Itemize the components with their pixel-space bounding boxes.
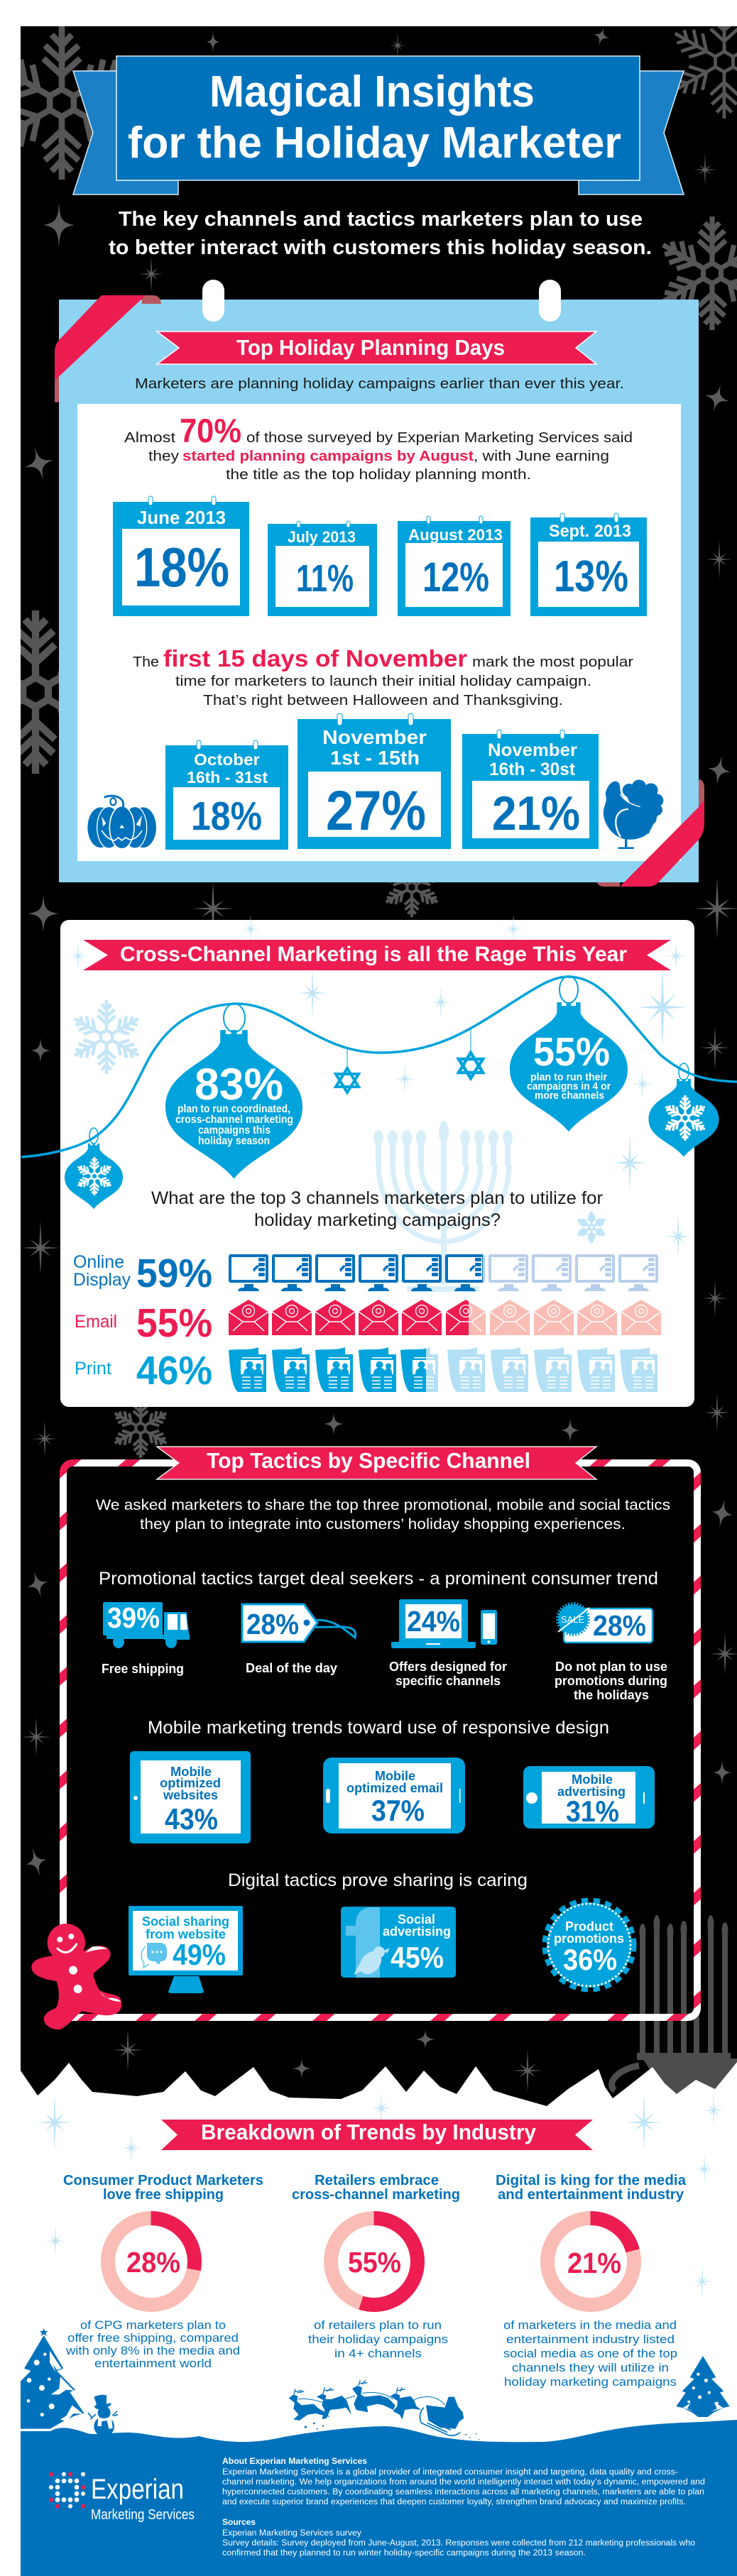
panel: top tactics by specific channel [31, 1447, 697, 2029]
text: 70 percent statement: , with June earning [474, 449, 609, 464]
column: digital media and entertainment: channels they will utilize in [512, 2361, 669, 2374]
donut: 55 percent [331, 2218, 417, 2305]
title text: for the Holiday Marketer [128, 119, 621, 168]
black night background [21, 26, 737, 2127]
icon: truck 39 percent free shipping: Free shipping [102, 1661, 184, 1676]
icon: laptop and phone 24 percent [389, 1599, 507, 1688]
calendar: Sept 2013 [530, 513, 647, 616]
calendar: October 16-31 [165, 740, 288, 850]
menorah watermark [373, 1121, 513, 1292]
seal: product promotions 36 percent: Product [565, 1919, 613, 1934]
column: retailers: their holiday campaigns [308, 2333, 448, 2346]
subtitle: The key channels and tactics marketers plan to use [119, 208, 643, 231]
seal: product promotions 36 percent: 36% [563, 1943, 617, 1976]
icon: laptop and phone 24 percent: Offers designed for [389, 1659, 507, 1674]
calendar: June 2013: June 2013 [137, 507, 226, 528]
sleigh with Santa [305, 2397, 480, 2440]
icon: sale badge 28 percent: the holidays [574, 1687, 649, 1702]
icon: pumpkin [87, 796, 156, 849]
calendar: October 16-31: October [194, 750, 260, 769]
light decorative stars and flakes [68, 915, 691, 1259]
channel: email: 55% [136, 1300, 212, 1346]
channel: print: 46% [136, 1348, 212, 1393]
channel: print [75, 1347, 657, 1393]
snowman [88, 2395, 118, 2437]
calendar: August 2013: 12% [422, 554, 489, 601]
subtitle: to better interact with customers this holiday season. [109, 236, 652, 259]
snow drift edge [0, 2062, 737, 2137]
calendar: June 2013: 18% [134, 536, 229, 598]
column: digital media and entertainment: holiday marketing campaigns [504, 2375, 677, 2389]
calendar: July 2013: 11% [296, 557, 354, 600]
text: first 15 days of November: mark the most popular [472, 654, 633, 670]
logo dot mark [49, 2472, 85, 2509]
column: consumer product marketers: with only 8% in the media and [65, 2344, 240, 2357]
about text: About Experian Marketing Services [222, 2457, 367, 2466]
ornament: 55 percent: more channels [535, 1090, 604, 1102]
device: phone 31 percent: 31% [566, 1794, 619, 1828]
panel background [60, 920, 694, 1407]
Experian logo: Experian [91, 2474, 184, 2505]
column: digital media and entertainment: Digital is king for the media [496, 2173, 687, 2188]
column: digital media and entertainment: and entertainment industry [498, 2187, 684, 2203]
icon: tag 28 percent deal of the day: 28% [246, 1608, 299, 1640]
heading: mobile marketing: Mobile marketing trends toward use of responsive design [148, 1718, 609, 1738]
calendar: July 2013: July 2013 [288, 528, 356, 546]
text: 70 percent statement: of those surveyed by Experian Marketing Services said [246, 430, 633, 446]
column: retailers: of retailers plan to run [314, 2318, 442, 2332]
ornament: 83 percent: cross-channel marketing [175, 1114, 293, 1126]
donut: 21 percent: 21% [567, 2247, 621, 2279]
question text: What are the top 3 channels marketers plan to utilize for [151, 1188, 603, 1208]
icon: sale badge 28 percent: SALE [561, 1614, 584, 1625]
calendar: July 2013 [268, 521, 377, 616]
question text [151, 1188, 603, 1230]
banner: top tactics: Top Tactics by Specific Channel [207, 1448, 530, 1473]
icon: sale badge 28 percent: Do not plan to use [555, 1659, 667, 1674]
channel: online display: Display [73, 1270, 131, 1290]
banner: cross-channel marketing: Cross-Channel Marketing is all the Rage This Year [120, 943, 627, 966]
pictogram row: monitors [229, 1254, 658, 1291]
banner: cross-channel marketing [83, 940, 671, 970]
channel: online display: Online [73, 1252, 124, 1272]
about text: and execute superior brand experiences that deepen customer loyalty, strengthen brand advocacy and maximize profits. [222, 2498, 686, 2506]
column: digital media and entertainment: entertainment industry listed [506, 2333, 675, 2346]
column: consumer product marketers: offer free shipping, compared [67, 2331, 239, 2345]
calendar: Sept 2013: 13% [554, 552, 628, 601]
device: tablet 43 percent [130, 1751, 251, 1843]
text: first 15 days of November: The [133, 654, 159, 670]
text: 70 percent statement: started planning campaigns by August [182, 449, 474, 464]
intro sentence: Marketers are planning holiday campaigns earlier than ever this year. [135, 376, 624, 392]
title text [128, 67, 621, 168]
gingerbread man [31, 1924, 121, 2029]
calendar: August 2013: August 2013 [408, 526, 503, 544]
calendar: Sept 2013: Sept. 2013 [549, 522, 631, 541]
monitor: social sharing 49 percent: Social sharing [142, 1914, 229, 1929]
panel: breakdown of trends by industry [37, 2090, 724, 2389]
text: first 15 days of November [133, 645, 633, 708]
heading: digital tactics: Digital tactics prove sharing is caring [228, 1870, 528, 1890]
calendar: November 16-30 [462, 730, 599, 849]
ornament: 83 percent: holiday season [198, 1135, 270, 1147]
light decorative stars [37, 2090, 724, 2298]
panel: cross-channel marketing [21, 915, 737, 1407]
column: retailers [292, 2173, 460, 2360]
text: first 15 days of November: That’s right between Halloween and Thanksgiving. [203, 693, 563, 708]
large pale snowflake [70, 1000, 143, 1074]
about text: hyperconnected customers. By coordinating seamless interactions across all marketing channels, marketers are able to plan [222, 2488, 704, 2496]
calendar: August 2013 [398, 516, 511, 616]
white content panel [77, 404, 681, 861]
icon: turkey [604, 779, 663, 848]
pictogram row: newspapers [229, 1347, 657, 1392]
ornament: 83 percent: plan to run coordinated, [178, 1103, 290, 1115]
intro text: We asked marketers to share the top three promotional, mobile and social tactics [96, 1497, 670, 1513]
right christmas tree [676, 2356, 730, 2417]
donut: 55 percent: 55% [348, 2246, 401, 2279]
column: retailers: in 4+ channels [334, 2347, 422, 2360]
dark menorah behind tactics panel [612, 1915, 737, 2112]
icon: sale badge 28 percent: 28% [593, 1609, 646, 1642]
calendar: October 16-31: 18% [191, 794, 262, 839]
subtitle [109, 208, 652, 259]
blue ground [21, 2420, 737, 2576]
seal: product promotions 36 percent: promotions [554, 1931, 624, 1946]
banner: top tactics [157, 1447, 596, 1479]
heading: promotional tactics: Promotional tactics target deal seekers - a prominent consumer trend [99, 1569, 658, 1589]
column: consumer product marketers [63, 2173, 263, 2370]
text: 70 percent statement: the title as the top holiday planning month. [226, 467, 531, 483]
background snowflakes [0, 5, 737, 1458]
calendar: November 16-30: 21% [492, 786, 580, 840]
calendar: June 2013 [113, 496, 249, 616]
box: social advertising 45 percent: Social [398, 1912, 435, 1926]
column: retailers: cross-channel marketing [292, 2187, 460, 2203]
question text: holiday marketing campaigns? [254, 1210, 501, 1230]
channel: email: Email [75, 1312, 117, 1332]
corner ribbon bottom right [597, 779, 704, 887]
ornament: 83 percent [165, 1004, 302, 1178]
device: phone 31 percent [523, 1766, 655, 1829]
sources text: Experian Marketing Services survey [222, 2529, 361, 2538]
icon: sale badge 28 percent [555, 1604, 667, 1702]
ornament: 55 percent: campaigns in 4 or [527, 1080, 611, 1092]
sources text: confirmed that they planned to run winter holiday-specific campaigns during the 2013 season. [222, 2549, 586, 2558]
column: consumer product marketers: entertainment world [94, 2357, 212, 2370]
device: phone 37 percent [323, 1758, 465, 1834]
column: retailers: Retailers embrace [315, 2173, 439, 2188]
calendar: November 1-15 [297, 713, 451, 849]
left christmas tree [21, 2328, 84, 2429]
channel: print: Print [75, 1359, 111, 1379]
icon: tag 28 percent deal of the day [242, 1604, 356, 1675]
ribbon over panel bottom right [620, 800, 704, 887]
star of David ornaments [336, 1028, 483, 1092]
donut: 21 percent [547, 2218, 634, 2305]
device: phone 31 percent: Mobile [572, 1772, 613, 1787]
donut: 28 percent [108, 2218, 195, 2305]
banner: top holiday planning days [157, 331, 596, 364]
ornament: small right [649, 1063, 719, 1157]
channel: online display: 59% [136, 1251, 212, 1296]
title ribbon [73, 56, 684, 194]
device: phone 37 percent: optimized email [346, 1781, 443, 1795]
reindeer and sleigh [289, 2380, 480, 2440]
icon: sale badge 28 percent: promotions during [555, 1673, 667, 1688]
about text: channel marketing. We help organizations from around the world intelligently interact with today’s dynamic, empowered and [222, 2478, 705, 2487]
box: social advertising 45 percent [341, 1907, 456, 1980]
channel: online display [74, 1254, 658, 1291]
icon: laptop and phone 24 percent: specific channels [395, 1673, 501, 1688]
reindeer 1 [289, 2389, 330, 2421]
device: phone 31 percent: advertising [557, 1785, 626, 1799]
icon: laptop and phone 24 percent: 24% [407, 1605, 460, 1638]
box: social advertising 45 percent: advertising [383, 1924, 451, 1939]
corner ribbon top left [55, 295, 161, 402]
icon: tag 28 percent deal of the day: Deal of the day [246, 1660, 338, 1675]
Experian logo [49, 2472, 195, 2523]
calendar: November 16-30: November [488, 740, 577, 760]
pictogram row: envelopes [229, 1300, 661, 1335]
device: phone 37 percent: Mobile [375, 1769, 415, 1783]
device: tablet 43 percent: websites [163, 1788, 218, 1802]
reindeer 4 [390, 2387, 421, 2419]
calendar: November 16-30: 16th - 30st [489, 760, 576, 779]
seal: product promotions 36 percent [547, 1902, 632, 1988]
device: tablet 43 percent: 43% [165, 1802, 218, 1836]
Experian logo: Marketing Services [91, 2507, 195, 2523]
icon: truck 39 percent free shipping [102, 1601, 190, 1676]
background stars [21, 24, 737, 2092]
icon: truck 39 percent free shipping: 39% [107, 1601, 160, 1634]
reindeer 2 [317, 2387, 351, 2419]
calendar: October 16-31: 16th - 31st [187, 768, 268, 786]
sources text [222, 2519, 695, 2558]
sources text: Sources [222, 2519, 256, 2527]
calendar binding rings [202, 280, 561, 322]
banner: top holiday planning days: Top Holiday Planning Days [236, 335, 505, 360]
ornament: 83 percent: 83% [195, 1060, 283, 1109]
calendar: November 1-15: November [322, 726, 427, 748]
device: tablet 43 percent: optimized [160, 1776, 221, 1790]
banner: breakdown of trends: Breakdown of Trends by Industry [201, 2120, 537, 2144]
sources text: Survey details: Survey deployed from June-August, 2013. Responses were collected from 212 marketing professionals who [222, 2539, 695, 2548]
column: digital media and entertainment [496, 2173, 687, 2389]
about text [222, 2457, 705, 2506]
ornament: 55 percent [510, 976, 628, 1131]
intro text [96, 1497, 670, 1533]
text: first 15 days of November: first 15 days of November [163, 645, 467, 672]
intro text: they plan to integrate into customers’ holiday shopping experiences. [140, 1516, 626, 1533]
text: first 15 days of November: time for marketers to launch their initial holiday campaign. [175, 674, 591, 689]
calendar: November 1-15: 27% [326, 779, 426, 842]
ornament: 83 percent: campaigns this [198, 1124, 271, 1136]
title text: Magical Insights [209, 67, 535, 116]
column: digital media and entertainment: of marketers in the media and [503, 2318, 677, 2332]
ornament: 55 percent: plan to run their [530, 1071, 607, 1083]
device: phone 37 percent: 37% [371, 1794, 425, 1827]
device: tablet 43 percent: Mobile [170, 1765, 212, 1779]
reindeer 3 [352, 2380, 395, 2412]
text: 70 percent statement: 70% [180, 412, 241, 449]
banner: breakdown of trends [161, 2120, 593, 2150]
text: 70 percent statement: Almost [124, 430, 176, 446]
monitor: social sharing 49 percent [129, 1906, 243, 1993]
calendar: November 1-15: 1st - 15th [330, 747, 420, 769]
channel: email [75, 1300, 661, 1337]
text: 70 percent statement: they [148, 449, 179, 464]
box: social advertising 45 percent: 45% [391, 1941, 444, 1974]
monitor: social sharing 49 percent: from website [146, 1927, 226, 1941]
donut: 28 percent: 28% [126, 2246, 180, 2279]
footer: snowy blue ground and scenery [4, 2328, 737, 2576]
column: consumer product marketers: love free shipping [103, 2187, 224, 2203]
panel: top holiday planning days calendar [55, 280, 704, 887]
ornament: 55 percent: 55% [533, 1029, 610, 1075]
column: consumer product marketers: of CPG marketers plan to [80, 2318, 226, 2332]
monitor: social sharing 49 percent: 49% [173, 1938, 226, 1971]
column: consumer product marketers: Consumer Product Marketers [63, 2173, 263, 2188]
garland wire [21, 977, 737, 1157]
ornament: small left [65, 1128, 123, 1209]
candy cane frame [63, 1463, 697, 2017]
about text: Experian Marketing Services is a global provider of integrated consumer insight and targeting, data quality and cross- [222, 2468, 678, 2477]
text: 70 percent statement [124, 412, 633, 483]
calendar sheet [59, 300, 699, 882]
column: digital media and entertainment: social media as one of the top [503, 2347, 677, 2360]
